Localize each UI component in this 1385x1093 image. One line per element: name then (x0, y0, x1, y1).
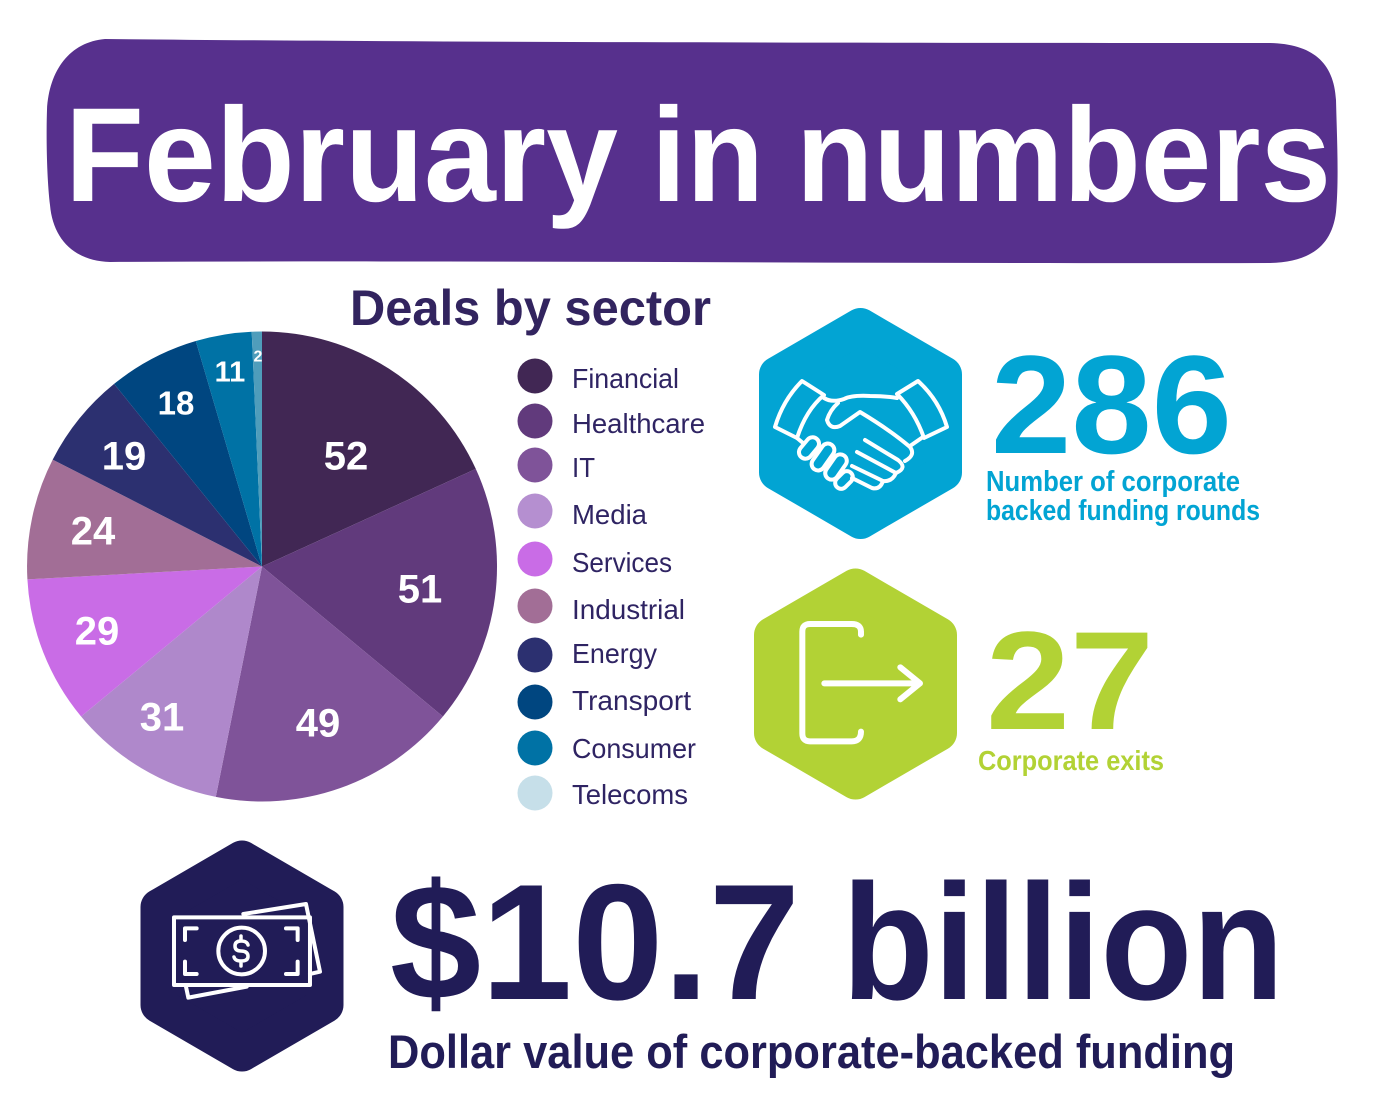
legend: Transport (572, 685, 691, 716)
legend: Energy (572, 638, 657, 669)
stat: dollar value (388, 850, 1284, 1078)
stat: dollar value: Dollar value of corporate-backed funding (388, 1025, 1235, 1078)
legend: Industrial (572, 594, 685, 625)
pie chart: deals by sector: 52 (324, 434, 368, 478)
pie chart: deals by sector: 51 (398, 568, 442, 612)
title text: numbers (796, 81, 1331, 230)
stat: corporate exits: Corporate exits (978, 745, 1164, 776)
icon: exit arrow in green hexagon (772, 586, 939, 782)
banner background (47, 39, 1338, 263)
stat: dollar value: billion (842, 850, 1284, 1034)
legend: Healthcare (572, 408, 705, 439)
legend: Services (572, 547, 672, 578)
title banner (47, 39, 1338, 263)
pie chart: deals by sector: 31 (140, 696, 184, 740)
pie chart: deals by sector: 11 (215, 356, 245, 388)
pie chart: deals by sector: 18 (158, 384, 194, 422)
icon: banknotes in navy hexagon (158, 858, 326, 1054)
title text: in (651, 81, 764, 230)
pie chart: deals by sector: 19 (102, 434, 146, 478)
legend: Media (572, 499, 647, 530)
legend: Telecoms (572, 779, 688, 810)
legend: Financial (572, 363, 679, 394)
title text (65, 81, 1331, 230)
pie chart: deals by sector: 24 (71, 510, 116, 554)
icon: handshake in blue hexagon (775, 326, 947, 521)
legend (518, 358, 705, 810)
pie chart: deals by sector (27, 331, 497, 801)
legend: IT (572, 452, 595, 483)
stat: corporate exits: 27 (986, 602, 1154, 759)
stat: corporate funding rounds: Number of corporate (986, 466, 1240, 498)
pie chart: deals by sector: 2 (254, 348, 263, 366)
heading: deals by sector: Deals by sector (350, 280, 711, 336)
stat: corporate funding rounds: 286 (991, 326, 1232, 483)
legend: Consumer (572, 733, 696, 764)
title text: February (65, 81, 618, 230)
stat: corporate funding rounds (986, 326, 1260, 527)
stat: corporate funding rounds: backed funding rounds (986, 495, 1260, 527)
pie chart: deals by sector: 29 (75, 610, 119, 654)
pie chart: deals by sector: 49 (296, 702, 340, 746)
stat: dollar value: $10.7 (390, 850, 800, 1034)
